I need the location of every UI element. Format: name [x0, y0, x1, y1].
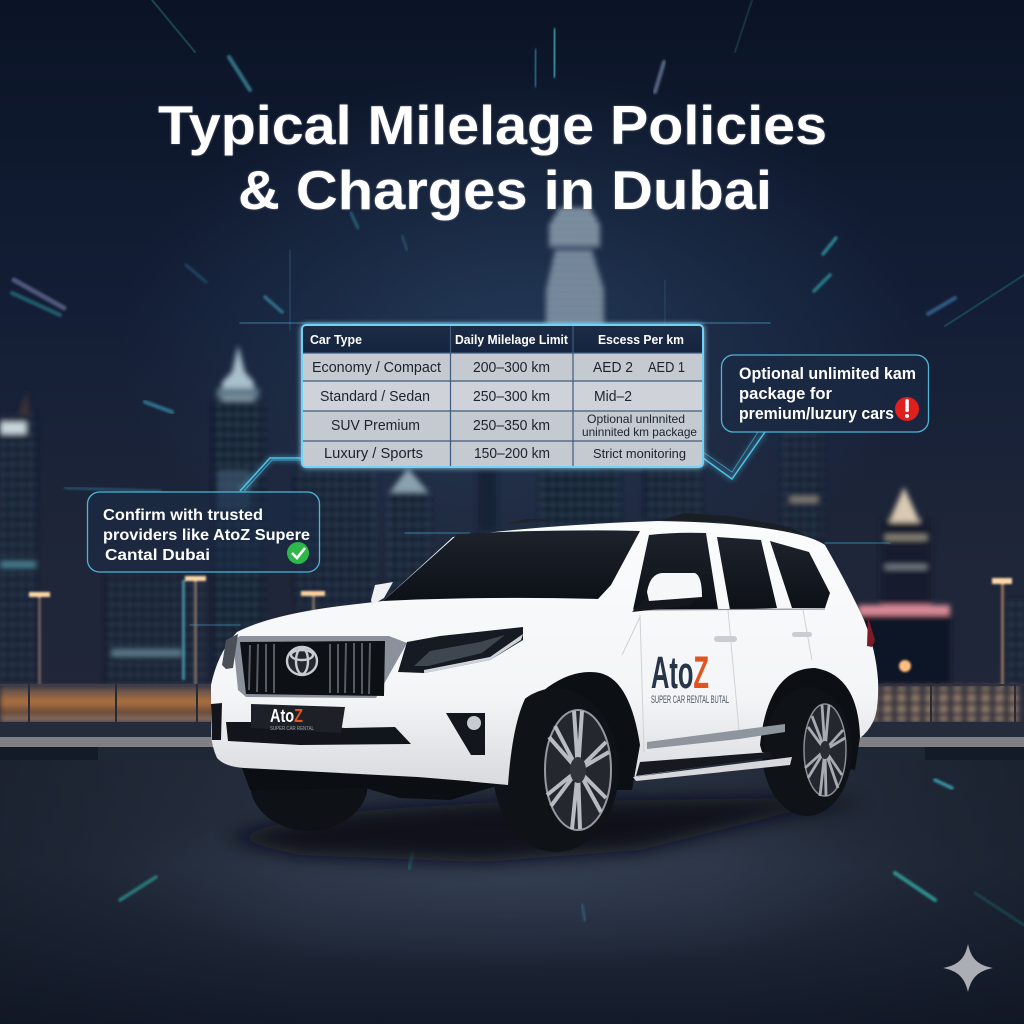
- side mirror: [632, 573, 702, 612]
- table header: Car Type: [310, 333, 362, 347]
- callout text: package for: [739, 385, 833, 403]
- windshield: [383, 530, 640, 601]
- spokes: [547, 711, 609, 829]
- rear wheel arch: [760, 668, 860, 770]
- callout text: Optional unlimited kam: [739, 365, 916, 383]
- table rows: [312, 360, 697, 462]
- lower intake: [226, 722, 411, 745]
- table rows: Economy / Compact: [312, 360, 441, 376]
- door handles: [714, 632, 812, 642]
- car shadow: [226, 798, 866, 862]
- callout text: Confirm with trusted: [103, 507, 263, 524]
- door seams: [622, 610, 812, 752]
- far front wheel: [242, 735, 510, 831]
- fog lamp: [446, 713, 485, 755]
- front wheel arch: [505, 672, 640, 790]
- background: central glow: [120, 70, 920, 610]
- connector: table to right callout: [703, 432, 765, 479]
- door logo: AtoZ: [651, 647, 709, 698]
- window sill line: [633, 609, 825, 610]
- table rows: 250–300 km: [473, 389, 550, 405]
- tyre: [493, 688, 619, 852]
- table rows: Strict monitoring: [593, 447, 686, 461]
- callout text: Cantal Dubai: [105, 547, 210, 564]
- table rows: AED 2: [593, 360, 633, 376]
- panel: mileage table: [302, 325, 703, 467]
- connector: table to left callout: [240, 458, 302, 491]
- roof rail: [662, 513, 806, 536]
- rim: [545, 710, 611, 830]
- front door glass: [633, 533, 718, 610]
- icon: Toyota emblem: [287, 647, 317, 675]
- front plate: AtoZ: [270, 706, 303, 726]
- icon: green check: [287, 542, 309, 564]
- front plate: [251, 704, 345, 733]
- far roof rail: [505, 519, 565, 524]
- table rows: Luxury / Sports: [324, 446, 423, 462]
- table rows: Mid–2: [594, 389, 632, 405]
- door logo: SUPER CAR RENTAL BUTAL: [651, 694, 729, 706]
- callout: unlimited package: [722, 355, 928, 432]
- car: white Toyota SUV: [211, 513, 878, 852]
- tail light: [867, 617, 875, 647]
- table rows: uninnited km package: [582, 425, 697, 439]
- icon: red exclamation: [895, 397, 919, 421]
- callout text: [739, 365, 916, 423]
- table header: [310, 333, 684, 347]
- table rows: SUV Premium: [331, 418, 420, 434]
- title: [158, 94, 827, 221]
- skyline: blurred Dubai buildings: [0, 207, 1024, 690]
- table rows: AED 1: [648, 360, 685, 376]
- table header: Escess Per km: [598, 333, 684, 347]
- table rows: Standard / Sedan: [320, 389, 430, 405]
- rear wheel: [764, 687, 852, 815]
- front wheel: [493, 688, 619, 852]
- title: Typical Milelage Policies: [158, 94, 827, 156]
- callout text: providers like AtoZ Supere: [103, 527, 310, 544]
- running board: [633, 752, 792, 781]
- table rows: 250–350 km: [473, 418, 550, 434]
- ground: asphalt: [0, 760, 1024, 1024]
- rear quarter glass: [770, 541, 830, 608]
- front left vent: [211, 703, 222, 740]
- waterfront lights and railing: [0, 684, 1024, 761]
- street lamps: [29, 576, 1012, 687]
- hub: [570, 757, 586, 783]
- car body: [211, 521, 878, 788]
- far headlight: [222, 634, 238, 669]
- callout: trusted providers: [88, 492, 320, 572]
- table rows: Optional unlnnited: [587, 412, 685, 426]
- callout text: [103, 507, 310, 564]
- ground: side vignette: [0, 760, 1024, 1024]
- ground: light pool: [90, 790, 930, 970]
- rear door glass: [717, 537, 777, 610]
- rear wheel tyre: [762, 686, 852, 816]
- front bumper corner over tyre: [470, 690, 530, 785]
- table header: Daily Milelage Limit: [455, 333, 569, 347]
- title: & Charges in Dubai: [238, 159, 772, 221]
- watermark: sparkle: [943, 944, 993, 992]
- table rows: 200–300 km: [473, 360, 550, 376]
- front plate: SUPER CAR RENTAL: [270, 726, 314, 732]
- table frame and rows: [302, 325, 703, 467]
- table rows: 150–200 km: [474, 446, 550, 462]
- side trim: [647, 724, 785, 749]
- headlight: [222, 627, 523, 673]
- grille: [233, 636, 407, 698]
- far mirror: [371, 582, 393, 605]
- callout text: premium/luzury cars: [739, 405, 894, 423]
